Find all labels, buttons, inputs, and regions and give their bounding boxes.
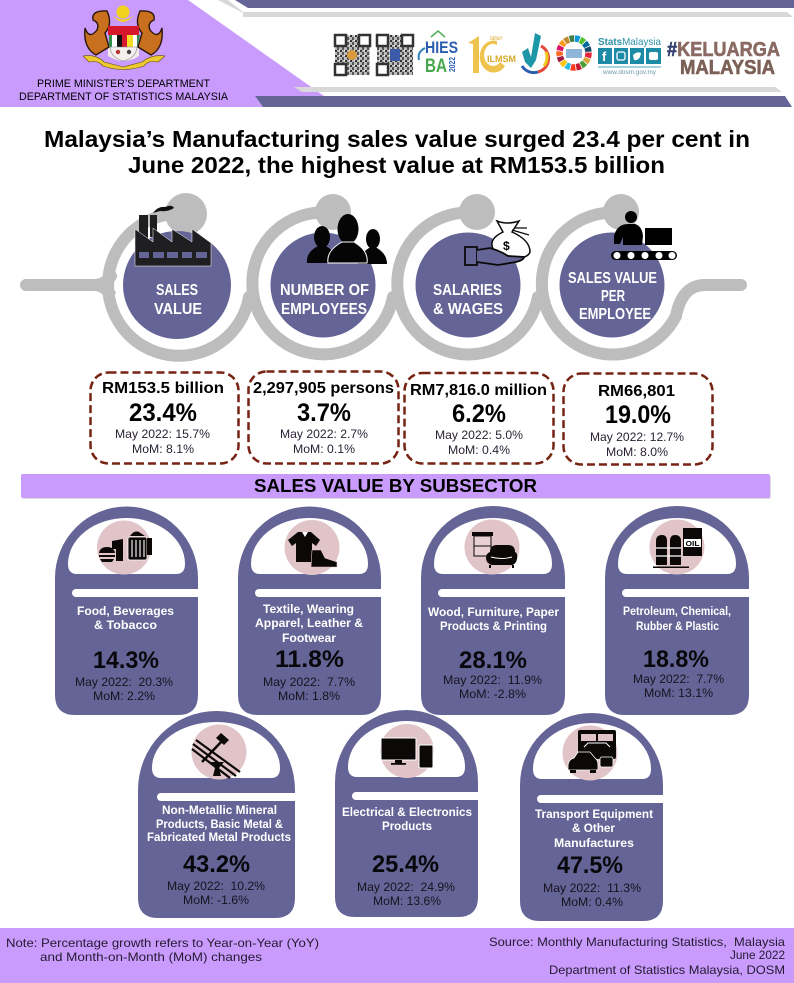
panel: salaries and wages circle: & WAGES — [433, 301, 503, 318]
panel: sales value per employee circle — [560, 211, 677, 338]
panel: number of employees circle: NUMBER OF — [280, 282, 369, 299]
card: textile, apparel, leather and footwear: Footwear — [282, 631, 336, 645]
logo: HIES BA 2022: HIES — [425, 38, 458, 57]
card: non-metallic, basic metal and fabricated metal: Non-Metallic Mineral — [162, 803, 277, 817]
card: electrical and electronics: Products — [382, 819, 432, 833]
card: transport equipment and other manufactures: May 2022: 11.3% — [543, 881, 641, 895]
panel: number of employees circle: EMPLOYEES — [281, 301, 367, 318]
icon: QR code 1 — [335, 35, 370, 75]
card: transport equipment and other manufactures: Transport Equipment — [535, 807, 653, 821]
stat box: employees: 2,297,905 persons — [253, 380, 394, 397]
logo: HIES BA 2022: BA — [425, 56, 447, 77]
card: petroleum, chemical, rubber and plastic: 18.8% — [643, 646, 709, 673]
card: textile, apparel, leather and footwear: 11.8% — [275, 646, 344, 673]
card: petroleum, chemical, rubber and plastic: Rubber & Plastic — [636, 619, 719, 633]
logo: #KeluargaMalaysia: #KELUARGA — [667, 39, 780, 61]
stat box: salaries: May 2022: 5.0% — [435, 428, 523, 442]
icon: monitor and phone — [381, 738, 433, 768]
logo: 10 years ILMSM: tahun — [490, 36, 503, 42]
card: non-metallic, basic metal and fabricated metal: May 2022: 10.2% — [167, 879, 265, 893]
footer — [0, 928, 794, 983]
card: transport equipment and other manufactures — [520, 713, 663, 921]
card: non-metallic, basic metal and fabricated metal: 43.2% — [183, 851, 250, 878]
card: wood, furniture, paper and printing: Products & Printing — [440, 619, 547, 633]
logo: #KeluargaMalaysia: MALAYSIA — [680, 57, 775, 79]
logo: StatsMalaysia social — [598, 36, 661, 76]
title: June 2022, the highest value at RM153.5 billion — [128, 152, 665, 178]
stat box: salaries: MoM: 0.4% — [448, 443, 510, 457]
header banner — [0, 0, 794, 107]
card: wood, furniture, paper and printing: 28.1% — [459, 647, 527, 674]
card: non-metallic, basic metal and fabricated metal: Fabricated Metal Products — [147, 830, 291, 844]
stat box: employees — [248, 372, 398, 464]
logo: StatsMalaysia social: StatsMalaysia — [598, 36, 661, 48]
card: transport equipment and other manufactures: & Other — [572, 821, 615, 835]
logo: HIES BA 2022 — [419, 31, 458, 77]
card: food, beverages and tobacco: 14.3% — [93, 647, 159, 674]
logo: 10 years ILMSM: ILMSM — [487, 54, 516, 64]
stat box: salaries — [404, 373, 554, 464]
stat box: per employee: 19.0% — [605, 401, 671, 429]
stat box: per employee: May 2022: 12.7% — [590, 430, 684, 444]
icon: people — [307, 214, 387, 264]
logo: SDG wheel — [560, 38, 588, 68]
header text: department: PRIME MINISTER’S DEPARTMENT — [37, 78, 210, 90]
card: electrical and electronics: May 2022: 24.9% — [357, 880, 455, 894]
icon: oil tanks and barrel — [653, 528, 702, 568]
panel: sales value per employee circle: PER — [601, 288, 625, 305]
panel: salaries and wages circle — [416, 221, 530, 338]
card: wood, furniture, paper and printing — [421, 506, 565, 715]
logo: census hand — [522, 33, 549, 73]
card: wood, furniture, paper and printing: Wood, Furniture, Paper — [428, 605, 559, 619]
card: food, beverages and tobacco: MoM: 2.2% — [93, 689, 155, 703]
panel: sales value per employee circle: SALES VALUE — [568, 270, 657, 287]
footer source: Source: Monthly Manufacturing Statistics, Malaysia — [489, 935, 785, 949]
connector rings — [26, 193, 741, 356]
card: non-metallic, basic metal and fabricated metal: Products, Basic Metal & — [156, 817, 283, 831]
footer source — [489, 935, 785, 977]
panel: sales value circle — [123, 206, 231, 339]
card: transport equipment and other manufactures: Manufactures — [554, 836, 634, 850]
card: non-metallic, basic metal and fabricated metal — [138, 711, 295, 918]
card: food, beverages and tobacco: May 2022: 20.3% — [75, 675, 173, 689]
panel: sales value per employee circle: EMPLOYEE — [579, 306, 651, 323]
icon: bus and cars — [568, 730, 616, 773]
header text: department: DEPARTMENT OF STATISTICS MALAYSIA — [19, 91, 229, 103]
panel: sales value circle: VALUE — [154, 301, 202, 318]
stat box: sales value — [90, 372, 238, 464]
stat box: sales value: MoM: 8.1% — [132, 442, 194, 456]
card: petroleum, chemical, rubber and plastic: Petroleum, Chemical, — [623, 604, 731, 618]
card: textile, apparel, leather and footwear: MoM: 1.8% — [278, 689, 340, 703]
stat box: per employee: RM66,801 — [598, 383, 675, 400]
card: electrical and electronics: 25.4% — [372, 851, 439, 878]
card: food, beverages and tobacco — [55, 506, 198, 715]
stat box: salaries: RM7,816.0 million — [410, 382, 547, 399]
footer note: Note: Percentage growth refers to Year-on-Year (YoY) — [6, 936, 319, 950]
stat box: employees: May 2022: 2.7% — [280, 427, 368, 441]
panel: sales value circle: SALES — [156, 282, 198, 299]
stat box: salaries: 6.2% — [452, 400, 506, 428]
card: textile, apparel, leather and footwear — [238, 506, 381, 715]
footer note: and Month-on-Month (MoM) changes — [40, 950, 262, 964]
stat box: employees: 3.7% — [297, 399, 351, 427]
icon: furniture — [472, 532, 517, 568]
logo: StatsMalaysia social: www.dosm.gov.my — [602, 69, 657, 76]
card: wood, furniture, paper and printing: May 2022: 11.9% — [443, 673, 542, 687]
logo: #KeluargaMalaysia — [667, 39, 780, 79]
card: transport equipment and other manufactures: MoM: 0.4% — [561, 895, 623, 909]
icon: factory — [135, 206, 211, 266]
panel: salaries and wages circle: SALARIES — [433, 282, 502, 299]
card: electrical and electronics — [335, 710, 478, 917]
card: textile, apparel, leather and footwear: Textile, Wearing — [263, 602, 354, 616]
card: electrical and electronics: Electrical & Electronics — [342, 805, 472, 819]
card: transport equipment and other manufactures: 47.5% — [557, 852, 623, 879]
icon: QR code 2 — [377, 35, 413, 75]
title — [44, 126, 750, 178]
icon: worker and conveyor — [611, 211, 677, 260]
panel: number of employees circle — [270, 214, 387, 338]
footer note — [6, 936, 319, 964]
heading: sales value by subsector: SALES VALUE BY SUBSECTOR — [254, 476, 537, 496]
card: electrical and electronics: MoM: 13.6% — [373, 894, 441, 908]
stat box: employees: MoM: 0.1% — [293, 442, 355, 456]
footer source: June 2022 — [730, 948, 785, 962]
icon: hammer, anvil and beams — [192, 733, 240, 778]
card: food, beverages and tobacco: & Tobacco — [94, 618, 157, 632]
stat box: per employee — [564, 374, 712, 464]
card: petroleum, chemical, rubber and plastic: MoM: 13.1% — [644, 686, 713, 700]
logo: 10 years ILMSM — [468, 36, 516, 73]
icon: oil tanks and barrel: OIL — [686, 539, 700, 548]
title: Malaysia’s Manufacturing sales value surged 23.4 per cent in — [44, 126, 750, 152]
card: petroleum, chemical, rubber and plastic — [605, 506, 749, 715]
card: textile, apparel, leather and footwear: May 2022: 7.7% — [263, 675, 355, 689]
card: petroleum, chemical, rubber and plastic: May 2022: 7.7% — [633, 672, 724, 686]
card: non-metallic, basic metal and fabricated metal: MoM: -1.6% — [183, 893, 249, 907]
icon: coat of arms — [83, 6, 165, 70]
card: textile, apparel, leather and footwear: Apparel, Leather & — [255, 616, 363, 630]
logo: StatsMalaysia social: f — [602, 49, 607, 64]
card: food, beverages and tobacco: Food, Beverages — [77, 604, 174, 618]
icon: hand with money bag: $ — [503, 239, 510, 253]
footer source: Department of Statistics Malaysia, DOSM — [549, 963, 785, 977]
icon: food and drink — [99, 532, 152, 562]
stat box: sales value: May 2022: 15.7% — [115, 427, 210, 441]
stat box: sales value: 23.4% — [129, 399, 197, 427]
icon: shirt and shoe — [288, 532, 337, 567]
stat box: per employee: MoM: 8.0% — [606, 445, 668, 459]
heading: sales value by subsector — [21, 474, 771, 499]
header text: department — [19, 78, 229, 103]
card: wood, furniture, paper and printing: MoM: -2.8% — [459, 687, 526, 701]
logo: HIES BA 2022: 2022 — [448, 57, 457, 72]
stat box: sales value: RM153.5 billion — [102, 380, 224, 397]
